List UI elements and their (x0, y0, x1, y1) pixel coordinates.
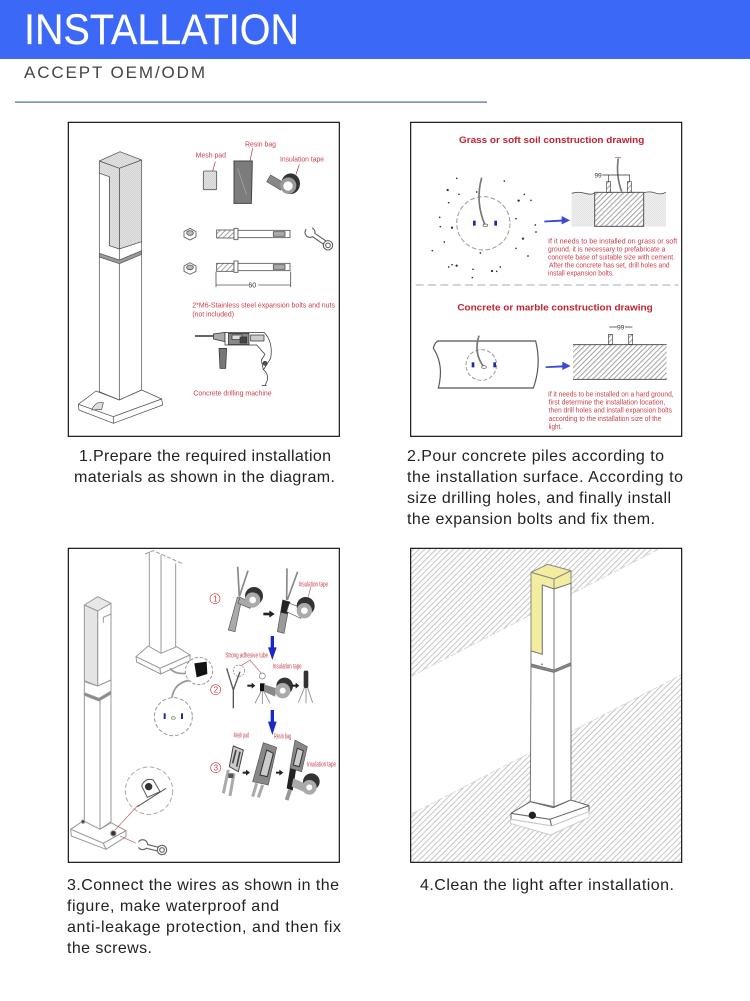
concrete section view: 99 (617, 324, 625, 331)
note: hard ground: light. (549, 424, 562, 431)
concrete section view (573, 324, 667, 379)
caption: step 1: materials as shown in the diagram. (74, 469, 335, 486)
screw detail (115, 767, 173, 845)
note: bolts: 2*M6-Stainless steel expansion bolts and nuts (192, 303, 335, 310)
caption: step 2: the expansion bolts and fix them. (407, 511, 655, 528)
icon: insulation tape (267, 157, 324, 194)
dimension: 60 (248, 283, 256, 290)
caption: step 3 (67, 877, 341, 957)
arrow: down blue (268, 636, 277, 660)
icon: mesh pad: Mesh pad (196, 153, 226, 160)
wiring step 1 (210, 567, 328, 633)
note: bolts: (not included) (192, 311, 234, 318)
concrete plan view (433, 336, 538, 388)
note: bolts (192, 303, 335, 318)
icon: wrench (135, 840, 167, 855)
wiring step 1: Insulation tape (299, 581, 328, 588)
bolts and nuts (184, 228, 291, 287)
caption: step 2: 2.Pour concrete piles according to (407, 448, 664, 465)
subtitle: ACCEPT OEM/ODM (24, 63, 205, 82)
panel: step 3 wiring (68, 548, 339, 862)
panel: step 1 materials: Concrete drilling machine (193, 391, 272, 398)
note: hard ground: then drill holes and install expansion bolts (549, 407, 672, 414)
wiring step 3: Mesh pad (234, 733, 249, 740)
soil plan view (431, 177, 537, 278)
wiring step 2 (211, 652, 313, 708)
wiring step 3: Insulation tape (307, 762, 336, 769)
icon: wrench (304, 226, 333, 250)
note: soft ground: ground, it is necessary to prefabricate a (548, 246, 665, 253)
caption: step 3: 3.Connect the wires as shown in the (67, 877, 339, 894)
note: soft ground: If it needs to be installed on grass or soft (548, 238, 677, 245)
caption: step 2: the installation surface. According to (407, 469, 683, 486)
note: hard ground: according to the installation size of the (549, 416, 661, 423)
note: hard ground: If it needs to be installed on a hard ground, (548, 391, 674, 398)
caption: step 2: size drilling holes, and finally install (407, 490, 671, 507)
wiring step 3: 3 (214, 764, 219, 773)
note: hard ground: first determine the installation location, (549, 399, 665, 406)
icon: insulation tape: Insulation tape (280, 157, 324, 164)
wiring step 2: Strong adhesive tube (225, 652, 268, 659)
header banner (0, 0, 750, 59)
icon: resin bag: Resin bag (245, 141, 276, 148)
arrow (544, 216, 570, 224)
lamp post drawing (78, 152, 163, 423)
post base with wiring (136, 551, 213, 736)
note: soft ground: install expansion bolts. (548, 270, 614, 277)
title: INSTALLATION (24, 7, 299, 54)
soil section view (572, 158, 666, 227)
soil section view: 99 (594, 172, 602, 179)
wiring step 3 (211, 733, 336, 800)
wiring step 2: 2 (214, 686, 219, 695)
background hatching (411, 549, 681, 862)
caption: step 1: 1.Prepare the required installation (79, 448, 331, 465)
caption: step 3: anti-leakage protection, and then fix (67, 919, 341, 936)
icon: mesh pad (196, 153, 226, 190)
note: soft ground (548, 238, 677, 277)
heading: grass: Grass or soft soil construction drawing (459, 135, 644, 145)
wiring step 3: Resin bag (274, 734, 291, 741)
caption: step 1 (74, 448, 335, 486)
icon: drill (195, 332, 271, 386)
panel: step 2 construction drawings (411, 122, 682, 436)
lamp post (510, 564, 589, 835)
panel: step 1 materials (68, 122, 339, 436)
caption: step 3: figure, make waterproof and (67, 898, 279, 915)
wiring step 1: 1 (213, 595, 218, 604)
note: soft ground: After the concrete has set, drill holes and (549, 262, 670, 269)
panel: step 4 finished lamp (411, 548, 682, 862)
heading: concrete: Concrete or marble construction drawing (457, 302, 653, 312)
caption: step 2 (407, 448, 683, 528)
arrow (546, 362, 571, 370)
caption: step 4: 4.Clean the light after installation. (420, 877, 674, 894)
note: hard ground (548, 391, 674, 431)
icon: resin bag (234, 141, 276, 203)
arrow: down blue (268, 710, 277, 735)
wiring step 2: Insulation tape (273, 664, 302, 671)
note: soft ground: concrete base of suitable size with cement. (548, 254, 675, 261)
assembled lamp post (71, 597, 126, 849)
caption: step 3: the screws. (67, 940, 152, 957)
